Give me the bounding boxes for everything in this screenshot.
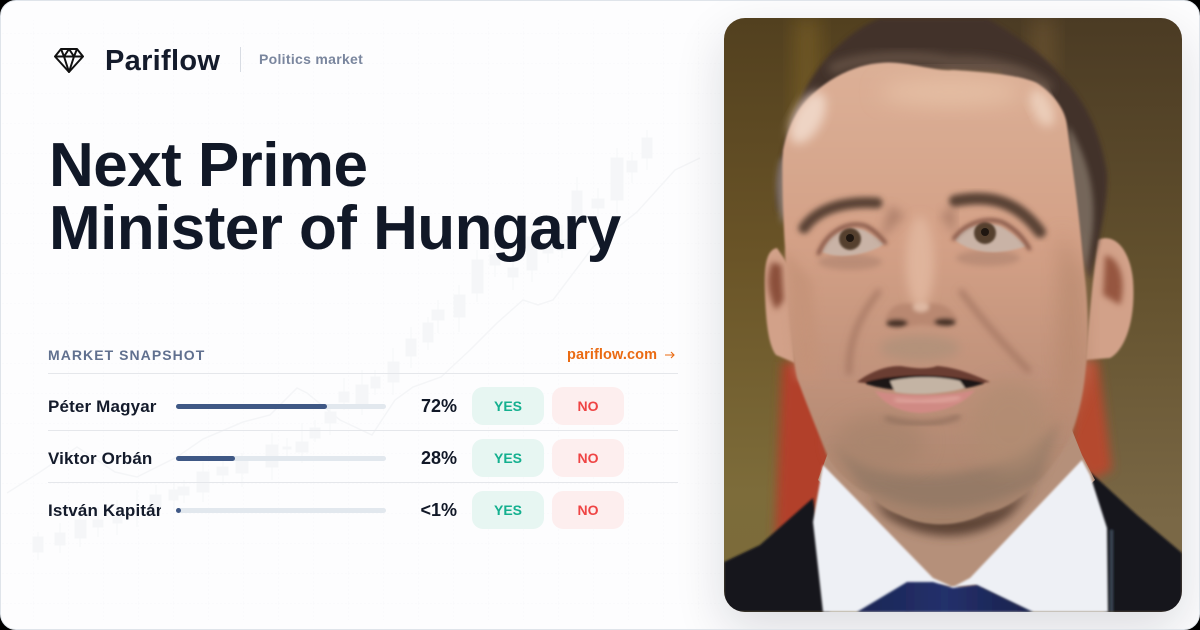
no button [552,491,624,529]
suit jacket [724,472,1182,612]
separator and category label: Politics market [259,51,363,67]
probability bar [176,508,386,513]
hair [777,18,1107,280]
row: Viktor Orbán [48,439,624,477]
arrow [665,352,675,358]
eyebrows [804,199,1040,232]
no button: NO [578,450,598,466]
brand header [54,45,363,77]
face [782,63,1088,524]
candidate name: Péter Magyar [48,397,157,416]
yes button: YES [494,502,522,518]
background curtain [724,18,1182,612]
no button [552,439,624,477]
nose [849,290,1030,375]
red flag behind [775,360,1112,540]
icon: diamond [54,48,84,73]
yes button [472,439,544,477]
skin shading [782,78,1085,509]
no button [552,387,624,425]
snapshot heading: MARKET SNAPSHOT [48,347,205,363]
probability bar [176,456,386,461]
neck [818,400,1095,600]
row: István Kapitány [48,491,624,529]
title [49,131,621,263]
probability bar [176,404,386,409]
white shirt collar [813,460,1108,612]
yes button: YES [494,450,522,466]
ears [765,238,1133,363]
brand name: Pariflow [105,45,220,77]
separator and category label [240,47,366,72]
eyes [818,205,1030,270]
percentage: <1% [420,500,457,520]
necktie [857,582,1033,612]
yes button [472,491,544,529]
title: Minister of Hungary [49,194,621,263]
no button: NO [578,502,598,518]
candidate name: Viktor Orbán [48,449,152,468]
title: Next Prime [49,131,367,200]
portrait photo [724,18,1182,612]
yes button [472,387,544,425]
background chart: faint candlesticks and trend line [7,158,700,493]
mouth [857,366,990,423]
row: Péter Magyar [48,387,624,425]
percentage: 28% [421,448,457,468]
site link: pariflow.com [567,347,657,363]
no button: NO [578,398,598,414]
percentage: 72% [421,396,457,416]
yes button: YES [494,398,522,414]
